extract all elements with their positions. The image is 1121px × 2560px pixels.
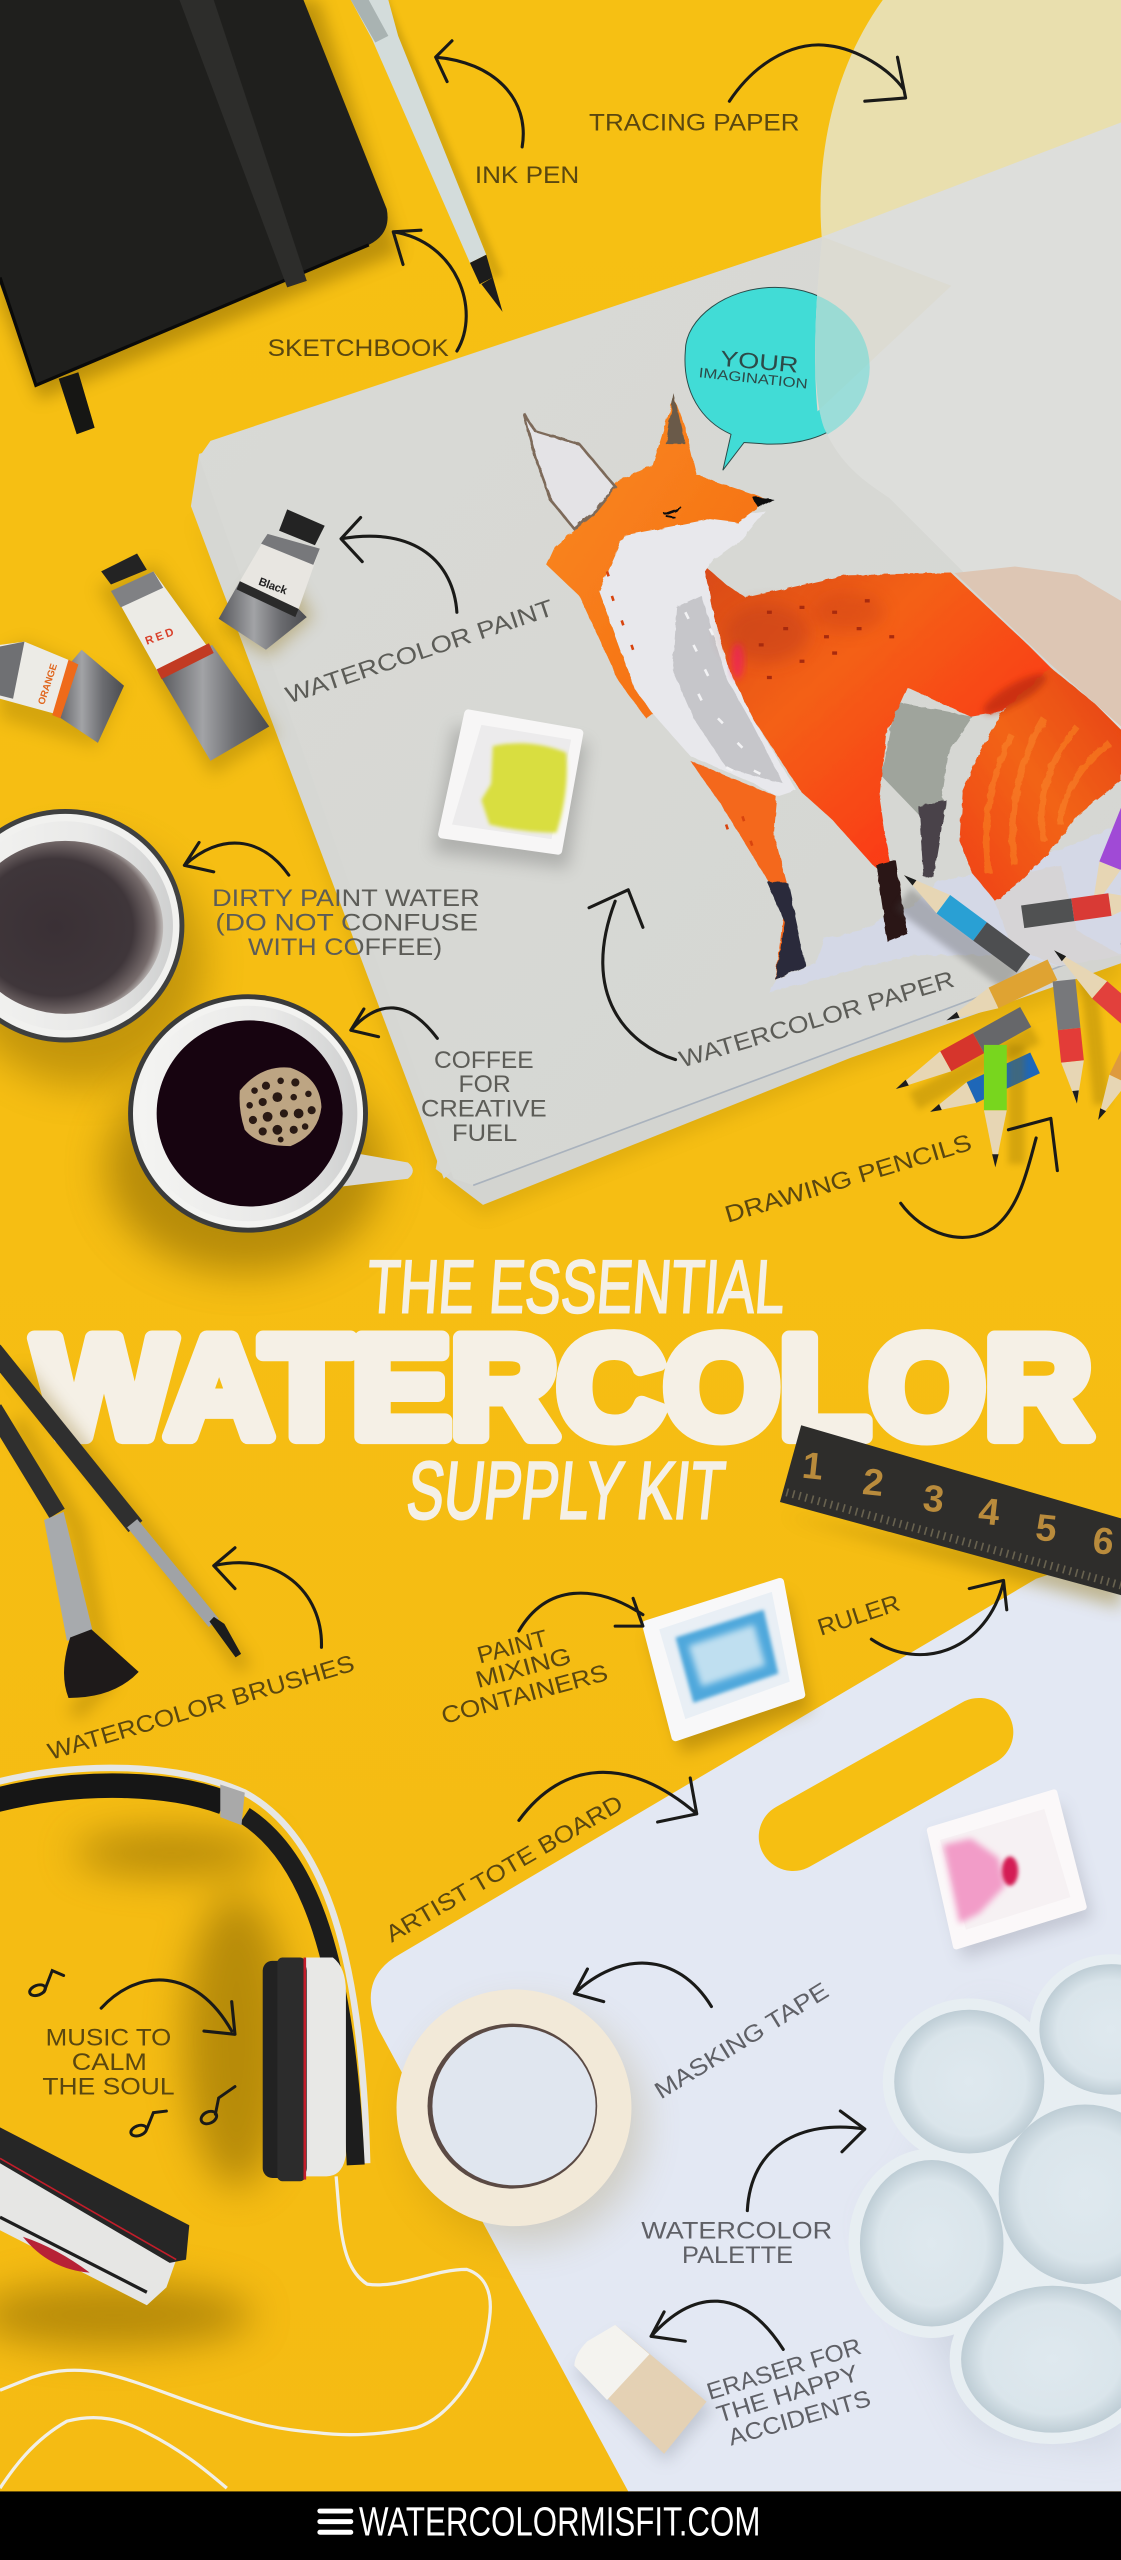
- label: coffee for creative fuel: CREATIVE: [421, 1097, 547, 1123]
- arrow: tracing paper: [729, 45, 906, 101]
- ruler numbers: [800, 1444, 1116, 1563]
- green pencil: [984, 1045, 1025, 1167]
- label: music to calm the soul: CALM: [72, 2050, 147, 2076]
- label: music to calm the soul: THE SOUL: [42, 2075, 175, 2101]
- red pencil right: [1047, 942, 1121, 1041]
- illustration: watercolor fox: [524, 393, 1121, 993]
- arrow: watercolor brushes: [214, 1548, 321, 1647]
- icon: eraser: [574, 2325, 713, 2462]
- panel: artist tote board: [371, 1551, 1121, 2491]
- arrow: dirty paint water: [184, 842, 289, 875]
- footer website: WATERCOLORMISFIT.COM: [359, 2498, 760, 2545]
- panel: tracing paper: [815, 0, 1121, 730]
- paper corner seen through the sheet: [815, 237, 951, 411]
- arrow: ink pen: [436, 41, 523, 147]
- blue pencil lower: [925, 1052, 1040, 1122]
- arrow: music: [101, 1980, 235, 2034]
- footer bar: [0, 2491, 1121, 2560]
- snow patch under the fox: [769, 824, 1121, 993]
- arrow: watercolor paper: [589, 890, 676, 1060]
- IMAGINATION: IMAGINATION: [698, 364, 808, 392]
- coffee foam: [240, 1067, 321, 1146]
- label: coffee for creative fuel: FUEL: [452, 1121, 517, 1147]
- label: ink pen: INK PEN: [475, 163, 579, 189]
- white chest: [599, 511, 796, 797]
- icon: sketchbook: [0, 0, 400, 434]
- ruler numbers: 3: [921, 1476, 946, 1520]
- arrow: coffee: [351, 1008, 437, 1038]
- left ear: [524, 413, 615, 529]
- speech bubble: [685, 287, 868, 470]
- title: Watercolor: WATERCOLOR: [34, 1308, 1092, 1468]
- cream fold: [821, 0, 1121, 245]
- dark and red pencil: [1021, 888, 1121, 928]
- arrow: palette: [747, 2111, 865, 2211]
- label: eraser for the happy accidents: THE HAPPY: [714, 2361, 862, 2429]
- fox shading: [607, 571, 1051, 846]
- far hind leg: [881, 702, 973, 877]
- label: watercolor brushes: WATERCOLOR BRUSHES: [45, 1651, 358, 1766]
- orange pencil: [941, 959, 1057, 1031]
- icon: coffee cup: [106, 994, 413, 1273]
- icon: hamburger menu: [320, 2511, 351, 2532]
- icon: headphones: [0, 1768, 490, 2488]
- translucent sheet: [815, 122, 1121, 730]
- left ear cup: [0, 2158, 176, 2305]
- nose and eye: [664, 498, 770, 518]
- label: coffee for creative fuel: FOR: [459, 1072, 511, 1098]
- paint wells: [860, 1964, 1121, 2433]
- tail white tip: [987, 865, 1121, 967]
- icon: yellow-green paint dish: [432, 713, 587, 869]
- body: [703, 565, 1052, 882]
- blue pencil: [885, 866, 1031, 991]
- label: eraser for the happy accidents: [704, 2334, 874, 2451]
- label: watercolor palette: PALETTE: [682, 2243, 793, 2269]
- red pencil lower: [890, 1007, 1040, 1115]
- label: eraser for the happy accidents: ACCIDENTS: [726, 2386, 874, 2451]
- arrow: ruler: [871, 1580, 1007, 1655]
- icon: orange paint tube: [0, 642, 124, 748]
- icon: blue mixing dish: [646, 1582, 811, 1753]
- tube label: RED: [144, 626, 175, 648]
- neck and head: [547, 397, 769, 718]
- icon: dirty water cup: [0, 809, 204, 1086]
- icon: drawing pencils: [885, 770, 1121, 1167]
- label: paint mixing containers: PAINT: [475, 1626, 551, 1669]
- icon: music notes: [28, 1971, 235, 2138]
- icon: red paint tube: [98, 553, 277, 776]
- bubble seen through the sheet: [815, 296, 870, 434]
- handle and ferrule: thin brush: [0, 1350, 135, 1527]
- arrow: sketchbook: [393, 230, 466, 351]
- headphone shadow: [0, 1830, 289, 2348]
- palette body: [849, 1954, 1121, 2444]
- arrows: [101, 41, 1057, 2349]
- label: music to calm the soul: [42, 2026, 175, 2101]
- purple pencil: [1081, 770, 1121, 915]
- handle and ferrule: fan brush: [0, 1409, 57, 1513]
- ruler numbers: 5: [1034, 1506, 1059, 1550]
- label: music to calm the soul: MUSIC TO: [46, 2026, 171, 2052]
- icon: ruler: [780, 1425, 1121, 1608]
- arrow: watercolor paint: [341, 518, 457, 612]
- orange pencil right: [1089, 1028, 1121, 1124]
- headband: [0, 1768, 367, 2163]
- ribbon: [59, 372, 95, 434]
- label: paint mixing containers: MIXING: [473, 1643, 574, 1694]
- label: dirty paint water: WITH COFFEE): [248, 935, 442, 961]
- arrow: drawing pencils: [901, 1118, 1057, 1237]
- label: drawing pencils: DRAWING PENCILS: [722, 1130, 975, 1229]
- panel: watercolor paper stack: [191, 122, 1121, 1216]
- label: sketchbook: SKETCHBOOK: [268, 336, 449, 362]
- label: ruler: RULER: [815, 1591, 903, 1642]
- tail: [959, 668, 1121, 901]
- title: Supply Kit: SUPPLY KIT: [403, 1446, 729, 1536]
- label: masking tape: MASKING TAPE: [650, 1978, 834, 2105]
- YOUR: YOUR: [719, 346, 799, 378]
- title block: [34, 1245, 1092, 1536]
- label: watercolor palette: WATERCOLOR: [641, 2218, 832, 2244]
- label: artist tote board: ARTIST TOTE BOARD: [382, 1791, 628, 1948]
- right ear cup: [305, 1958, 346, 2176]
- label: eraser for the happy accidents: ERASER FOR: [704, 2334, 864, 2406]
- label: paint mixing containers: CONTAINERS: [439, 1660, 611, 1730]
- icon: masking tape: [397, 1989, 643, 2243]
- icon: black paint tube: [219, 509, 325, 656]
- icon: ink pen: [351, 0, 503, 312]
- elastic band: [179, 0, 307, 287]
- arrow: paint mixing: [519, 1593, 643, 1631]
- label: watercolor paper: WATERCOLOR PAPER: [676, 967, 957, 1074]
- label: watercolor paint: WATERCOLOR PAINT: [282, 596, 557, 709]
- label: coffee for creative fuel: COFFEE: [434, 1048, 534, 1074]
- ruler numbers: 6: [1091, 1519, 1116, 1563]
- tube label: Black: [257, 576, 289, 598]
- label: dirty paint water: [212, 886, 480, 961]
- title: The Essential: THE ESSENTIAL: [364, 1245, 788, 1329]
- icon: watercolor palette: [849, 1954, 1121, 2449]
- label: coffee for creative fuel: [421, 1048, 547, 1147]
- label: tracing paper: TRACING PAPER: [589, 111, 800, 137]
- cable: [0, 2176, 490, 2435]
- label: dirty paint water: (DO NOT CONFUSE: [215, 911, 478, 937]
- label: watercolor palette: [641, 2218, 832, 2269]
- ruler numbers: 2: [861, 1460, 886, 1504]
- icon: pink mixing dish: [930, 1793, 1093, 1959]
- ruler numbers: 1: [800, 1444, 825, 1488]
- arrow: tote board: [519, 1772, 697, 1822]
- label: paint mixing containers: [439, 1626, 611, 1730]
- red pencil with grey end: [1053, 977, 1110, 1108]
- ruler numbers: 4: [977, 1489, 1002, 1533]
- label: dirty paint water: DIRTY PAINT WATER: [212, 886, 480, 912]
- tote handle slot: [793, 1732, 979, 1837]
- arrow: masking tape: [574, 1963, 711, 2007]
- arrow: eraser: [651, 2301, 783, 2349]
- fox tail seen through the sheet: [955, 567, 1121, 727]
- near front leg: [690, 761, 804, 980]
- tube label: ORANGE: [36, 662, 60, 706]
- icon: watercolor brushes: [0, 1350, 245, 1714]
